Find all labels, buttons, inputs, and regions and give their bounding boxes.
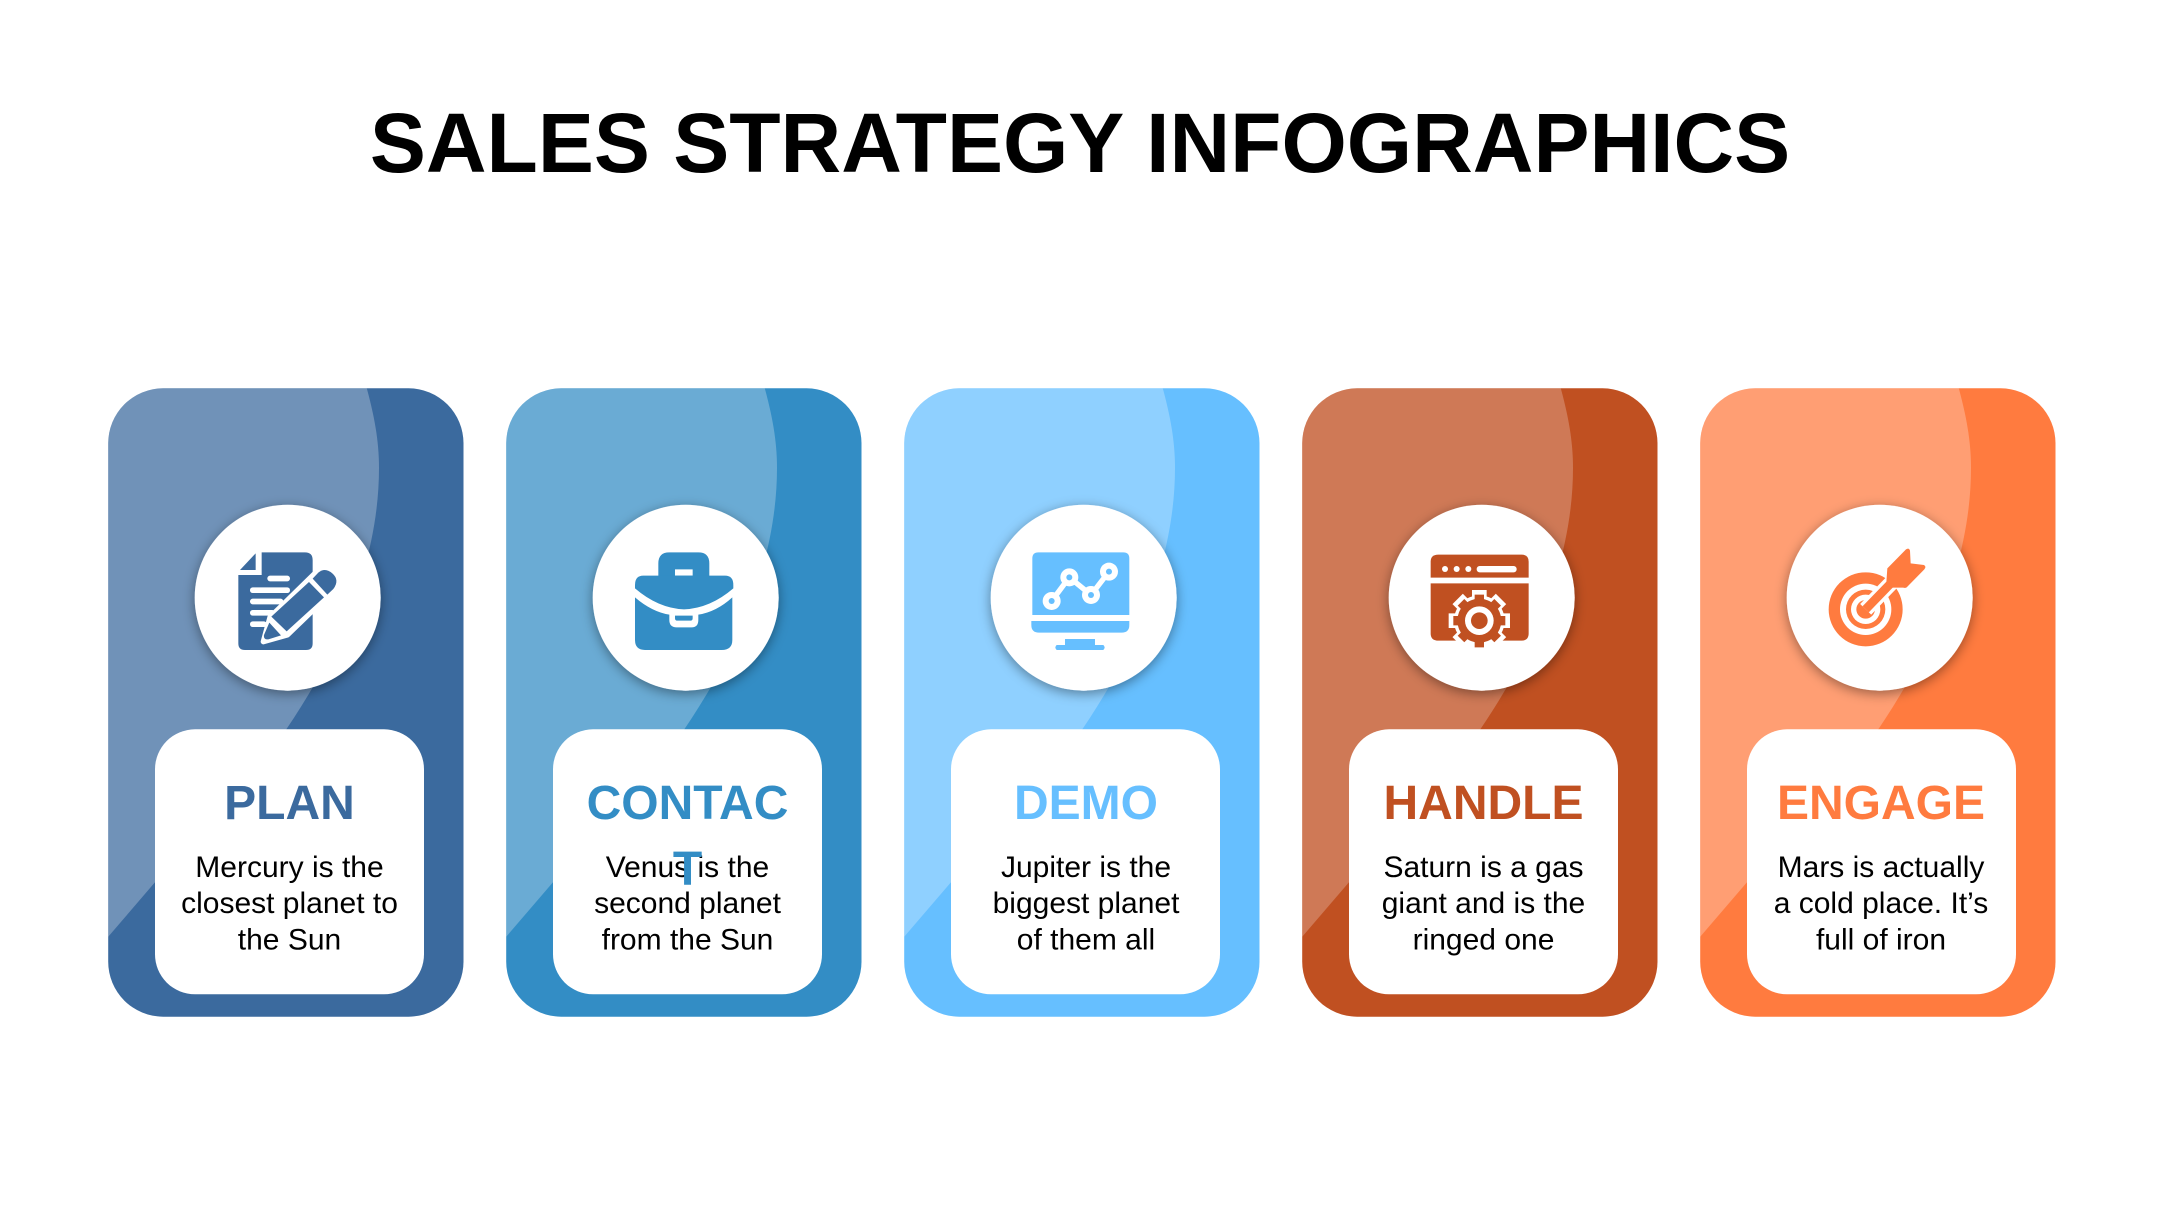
text card	[951, 729, 1220, 994]
description: Venus is the	[606, 851, 769, 884]
panel: contact	[506, 388, 862, 1017]
description: Jupiter is the	[1001, 851, 1171, 884]
icon: document with pencil	[238, 552, 337, 650]
description: full of iron	[1816, 924, 1946, 956]
panel: plan	[108, 388, 464, 1017]
heading: HANDLE	[1384, 777, 1584, 830]
panel: engage	[1700, 388, 2056, 1017]
icon: browser window with gear	[1431, 555, 1529, 651]
description: second planet	[594, 887, 782, 920]
heading: ENGAGE	[1777, 777, 1985, 830]
description: biggest planet	[993, 887, 1180, 920]
title: SALES STRATEGY INFOGRAPHICS	[370, 96, 1790, 190]
description: of them all	[1017, 924, 1155, 956]
description: ringed one	[1413, 924, 1554, 956]
heading: PLAN	[224, 777, 355, 830]
text card	[155, 729, 424, 994]
heading: CONTAC	[587, 777, 788, 830]
text card	[553, 729, 822, 994]
icon: briefcase	[635, 552, 733, 650]
icon: monitor with line chart	[1031, 552, 1129, 650]
panel: demo	[904, 388, 1260, 1017]
description: a cold place. It’s	[1774, 887, 1988, 920]
heading: DEMO	[1014, 777, 1158, 830]
description: Mercury is the	[195, 851, 384, 884]
description: Mars is actually	[1778, 851, 1984, 884]
icon: target with arrow	[1829, 549, 1925, 646]
text card	[1747, 729, 2016, 994]
heading: T	[673, 843, 702, 896]
description: Saturn is a gas	[1383, 851, 1584, 884]
description: the Sun	[238, 924, 341, 956]
description: from the Sun	[602, 924, 773, 956]
text card	[1349, 729, 1618, 994]
description: giant and is the	[1382, 887, 1585, 920]
description: closest planet to	[181, 887, 398, 920]
panel: handle	[1302, 388, 1658, 1017]
